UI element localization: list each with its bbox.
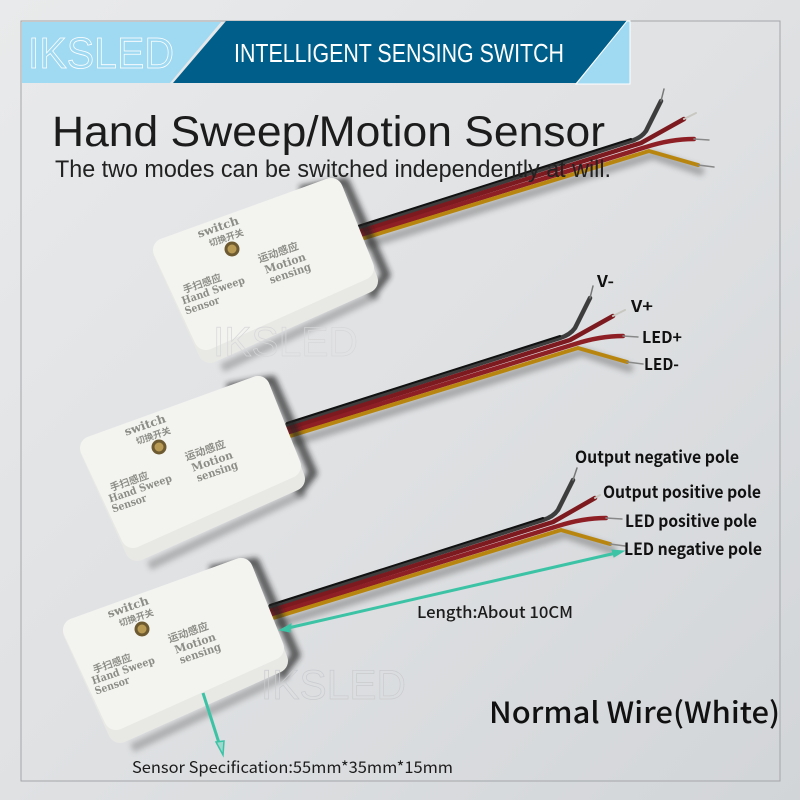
sensor 2: 切换开关	[134, 423, 172, 447]
label V+: V+	[630, 293, 653, 317]
arrow: sensor size	[203, 693, 224, 755]
sensor 1: 运动感应	[256, 238, 301, 266]
body top	[75, 570, 272, 718]
watermark 2: IKSLED	[261, 661, 406, 708]
body side	[92, 388, 293, 549]
label V-: V-	[596, 268, 614, 292]
sensor 3: Sensor	[93, 674, 132, 697]
LED	[134, 622, 150, 636]
sensor 2: 手扫感应	[107, 467, 150, 494]
label output positive: Output positive pole	[603, 479, 761, 503]
sensor 2: sensing	[195, 458, 240, 485]
printed labels: switch	[105, 593, 151, 621]
main title: Hand Sweep/Motion Sensor	[52, 108, 605, 156]
sensor 1	[165, 182, 386, 368]
LED	[152, 440, 166, 454]
shadow	[300, 182, 386, 296]
body top	[92, 388, 289, 536]
banner	[22, 21, 630, 84]
sensor 2: Hand Sweep	[107, 473, 173, 505]
sensor 1: Sensor	[183, 294, 222, 317]
arrow: cable length	[280, 550, 624, 632]
sensor 2: 运动感应	[183, 436, 228, 464]
sensor 3: 手扫感应	[90, 649, 133, 676]
lower shadow	[132, 674, 288, 748]
wire type label: Normal Wire(White)	[489, 690, 780, 732]
label output negative: Output negative pole	[575, 444, 739, 468]
sensor 2	[92, 380, 313, 566]
specification label: Sensor Specification:55mm*35mm*15mm	[132, 754, 453, 778]
sensor 3: Hand Sweep	[90, 655, 156, 687]
banner right light panel	[576, 21, 630, 84]
sensor 3: 运动感应	[166, 618, 211, 646]
lower shadow	[149, 492, 305, 566]
body top	[165, 190, 362, 338]
sensor 2: Motion	[190, 448, 235, 475]
sensor 2: Sensor	[110, 492, 149, 515]
banner title: INTELLIGENT SENSING SWITCH	[234, 38, 564, 68]
shadow	[227, 380, 313, 494]
sensor 3: Motion	[173, 630, 218, 657]
logo IKSLED: IKSLED	[28, 29, 174, 78]
banner dark panel	[173, 21, 627, 83]
sensor 1: 切换开关	[207, 225, 245, 249]
label LED-: LED-	[644, 351, 679, 375]
sensor 1: 手扫感应	[180, 269, 223, 296]
lower shadow	[222, 294, 378, 368]
label LED positive: LED positive pole	[625, 508, 757, 532]
sensor 1: Motion	[263, 250, 308, 277]
sensor 3: 切换开关	[117, 605, 155, 629]
sensor 3: sensing	[178, 640, 223, 667]
LED	[224, 242, 240, 256]
body side	[75, 570, 276, 731]
printed labels: switch	[195, 213, 241, 241]
banner left light panel	[22, 22, 221, 83]
sensor 1: Hand Sweep	[180, 275, 246, 307]
wires: sensor 3	[270, 468, 625, 625]
subtitle: The two modes can be switched independently at will.	[55, 156, 611, 183]
shadow	[210, 562, 296, 676]
sensor 3	[75, 562, 296, 748]
sensor 1: sensing	[268, 260, 313, 287]
length label: Length:About 10CM	[417, 599, 573, 623]
wires: sensor 1	[358, 89, 714, 246]
watermark 1: IKSLED	[213, 318, 358, 365]
label LED negative: LED negative pole	[624, 536, 762, 560]
label LED+: LED+	[642, 324, 682, 348]
printed labels: switch	[122, 411, 168, 439]
body side	[165, 190, 366, 351]
wires: sensor 2	[287, 286, 643, 443]
